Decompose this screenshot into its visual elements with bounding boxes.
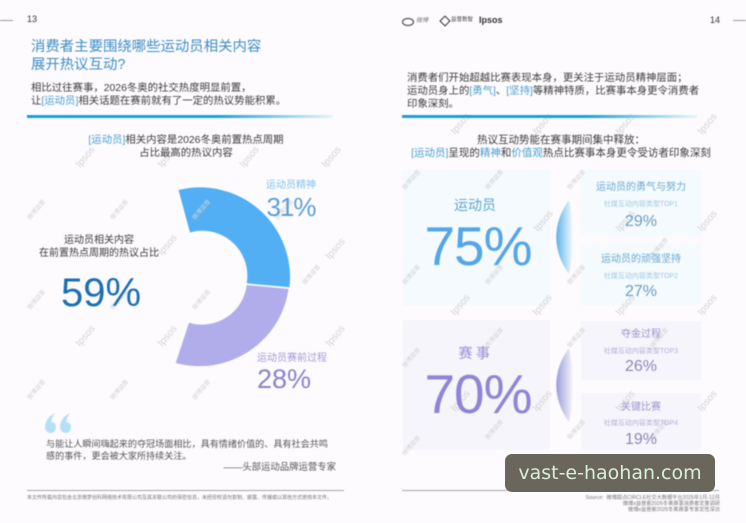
item: gold process: 夺金过程 — [621, 329, 661, 340]
intro text right: 运动员身上的[勇气]、[坚持]等精神特质，比赛事本身更令消费者 — [407, 86, 699, 97]
left page number: 13 — [27, 14, 37, 24]
label: athlete share: 运动员相关内容 — [64, 235, 134, 246]
watermarks: 微博益普 — [190, 378, 212, 401]
chart heading: [运动员]相关内容是2026冬奥前置热点周期 — [88, 135, 284, 146]
watermarks: Ipsos — [74, 145, 98, 170]
watermarks: Ipsos — [696, 209, 720, 234]
stat: 29%: 29% — [625, 213, 657, 230]
intro text left — [30, 82, 286, 107]
item note: courage: 社媒互动内容类型TOP1 — [604, 201, 678, 208]
quote text: 感的事件，更会被大家所持续关注。 — [46, 451, 192, 461]
quote attribution: ——头部运动品牌运营专家 — [223, 461, 336, 472]
watermarks: 微博益普 — [25, 288, 47, 311]
stat: 59%: 59% — [61, 271, 141, 315]
watermarks: Ipsos — [156, 324, 180, 349]
label: athletes: 运动员 — [454, 197, 496, 213]
watermarks: Ipsos — [320, 145, 344, 170]
watermarks: 微博益普 — [648, 236, 670, 259]
watermarks: Ipsos — [531, 293, 555, 318]
divider right — [402, 115, 697, 118]
watermarks: 微博益普 — [25, 198, 47, 221]
watermarks: 微博益普 — [108, 378, 130, 401]
watermarks: Ipsos — [156, 145, 180, 170]
divider left — [27, 115, 333, 118]
watermarks: 微博益普 — [400, 434, 422, 457]
panel: athlete background right page — [403, 170, 550, 305]
watermarks: Ipsos — [614, 389, 638, 414]
intro text right: 印象深刻。 — [407, 99, 459, 110]
watermarks: Ipsos — [74, 324, 98, 349]
right page number: 14 — [710, 15, 720, 25]
watermarks: 微博益普 — [190, 288, 212, 311]
watermarks: Ipsos — [324, 237, 348, 262]
stat: 75%: 75% — [424, 215, 532, 277]
chart heading — [88, 134, 284, 159]
source text: Source: 微博超点CIRCLE社交大数据平台2025年1月-12月 — [586, 495, 720, 501]
label: athlete spirit: 运动员精神 — [266, 180, 316, 191]
header logos: Ipsos — [479, 15, 503, 25]
watermarks: Ipsos — [449, 389, 473, 414]
footer line left — [27, 490, 344, 491]
footer disclaimer: 本文件所载内容包含北京微梦创科网络技术有限公司及其关联公司的保密信息，未经授权请勿复制、披露、传播或以其他方式使用本文件。 — [27, 494, 332, 500]
source text: 微博x益普索2026冬奥赛事消费者定量调研 — [623, 501, 720, 507]
watermarks: Ipsos — [614, 112, 638, 137]
intro text right — [406, 72, 700, 110]
watermarks: Ipsos — [449, 112, 473, 137]
watermarks: Ipsos — [531, 389, 555, 414]
header logos: 益普数智 — [451, 17, 473, 23]
watermarks: 微博益普 — [108, 288, 130, 311]
watermarks: 微博益普 — [648, 326, 670, 349]
watermarks: Ipsos — [696, 112, 720, 137]
title: 展开热议互动? — [31, 57, 125, 73]
title — [31, 38, 261, 73]
icon: purple crescent — [556, 348, 572, 422]
item note: key matches: 社媒互动内容类型TOP4 — [604, 420, 678, 427]
item note: perseverance: 社媒互动内容类型TOP2 — [604, 273, 678, 280]
watermarks: 微博益普 — [190, 198, 212, 221]
watermarks: 微博益普 — [108, 198, 130, 221]
watermarks: 微博益普 — [400, 346, 422, 369]
stat: 26%: 26% — [625, 358, 657, 375]
watermarks: Ipsos — [696, 389, 720, 414]
watermarks: 微博益普 — [565, 263, 587, 286]
watermarks: 微博益普 — [273, 198, 295, 221]
chart heading: 占比最高的热议内容 — [139, 148, 233, 159]
watermarks: 微博益普 — [565, 168, 587, 191]
watermarks: 微博益普 — [565, 418, 587, 441]
quote text — [46, 438, 328, 461]
icon: blue crescent — [556, 200, 572, 274]
icon: quotation marks — [44, 413, 72, 434]
panel: event background right page — [403, 320, 550, 450]
source text: 微博x益普索2026冬奥赛事专家定性深访 — [628, 507, 720, 513]
watermarks: Ipsos — [449, 293, 473, 318]
watermarks: Ipsos — [532, 209, 556, 234]
intro text left: 相比过往赛事，2026冬奥的社交热度明显前置， — [31, 82, 252, 94]
panel: perseverance — [581, 244, 701, 305]
watermarks: Ipsos — [531, 112, 555, 137]
source text — [586, 494, 720, 513]
right heading: [运动员]呈现的精神和价值观热点比赛事本身更令受访者印象深刻 — [411, 147, 711, 159]
watermarks: 微博益普 — [483, 326, 505, 349]
label: athlete share: 在前置热点周期的热议占比 — [39, 248, 159, 258]
label: events: 赛事 — [458, 345, 494, 361]
watermarks: 微博益普 — [483, 418, 505, 441]
watermarks: 微博益普 — [25, 378, 47, 401]
right heading — [411, 134, 711, 159]
watermarks: Ipsos — [614, 293, 638, 318]
watermarks: Ipsos — [324, 324, 348, 349]
header logos: 微博 — [416, 18, 428, 24]
stat: 19%: 19% — [625, 431, 657, 448]
watermarks: 微博益普 — [400, 168, 422, 191]
panel: gold medal process — [581, 321, 701, 380]
intro text right: 消费者们开始超越比赛表现本身，更关注于运动员精神层面； — [407, 72, 688, 84]
watermark badge — [505, 454, 715, 492]
header logos — [401, 14, 503, 28]
watermarks: 微博益普 — [648, 418, 670, 441]
footer line right — [402, 490, 719, 491]
right heading: 热议互动势能在赛事期间集中释放： — [477, 134, 645, 146]
item note: gold process: 社媒互动内容类型TOP3 — [604, 348, 678, 355]
watermarks: Ipsos — [238, 145, 262, 170]
panel: key matches — [581, 393, 701, 450]
watermarks: 微博益普 — [483, 168, 505, 191]
watermark badge: vast-e-haohan.com — [518, 462, 702, 484]
stat: 31%: 31% — [266, 192, 316, 222]
item: key matches: 关键比赛 — [621, 402, 661, 413]
watermarks: 微博益普 — [483, 263, 505, 286]
title: 消费者主要围绕哪些运动员相关内容 — [31, 39, 261, 55]
item: perseverance: 运动员的顽强坚持 — [601, 254, 681, 265]
stat: 27%: 27% — [625, 283, 657, 300]
watermarks: Ipsos — [156, 233, 180, 258]
label: pre-game process: 运动员赛前过程 — [257, 353, 327, 364]
label: athlete share — [38, 234, 160, 258]
quote text: 与能让人瞬间嗨起来的夺冠场面相比，具有情绪价值的、具有社会共鸣 — [46, 439, 328, 449]
stat: 70%: 70% — [424, 363, 532, 425]
watermarks: 微博益普 — [400, 263, 422, 286]
stat: 28%: 28% — [257, 364, 311, 394]
intro text left: 让[运动员]相关话题在赛前就有了一定的热议势能积累。 — [31, 96, 286, 106]
watermarks: Ipsos — [614, 209, 638, 234]
item: courage: 运动员的勇气与努力 — [596, 182, 686, 193]
watermarks: 微博益普 — [565, 326, 587, 349]
watermarks: 微博益普 — [300, 263, 322, 286]
watermarks: Ipsos — [696, 293, 720, 318]
panel: courage and effort — [581, 170, 701, 236]
